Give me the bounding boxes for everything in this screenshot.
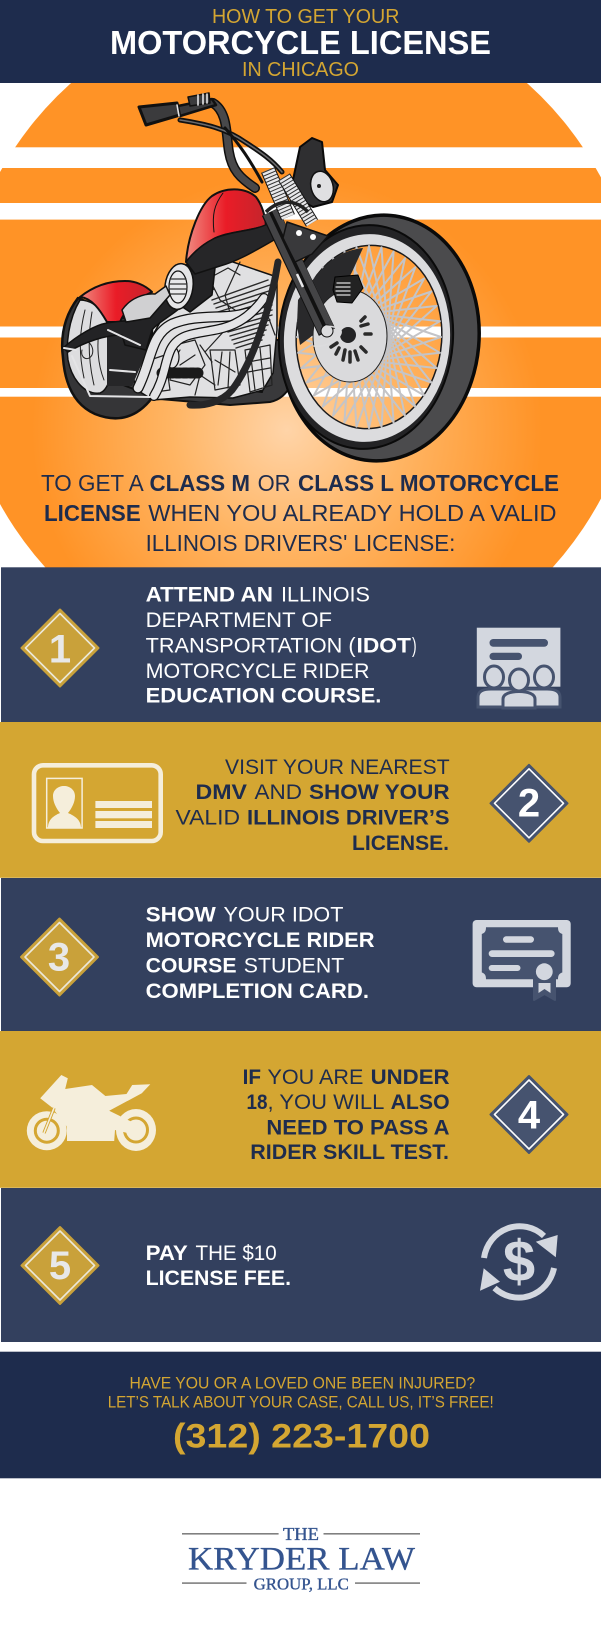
rear fender	[80, 281, 152, 322]
intro text: CLASS M	[150, 470, 250, 496]
step 4 text: RIDER SKILL TEST.	[250, 1141, 449, 1164]
logo	[182, 1524, 420, 1593]
step 2 text	[176, 756, 450, 855]
step 5 text: THE $10	[196, 1242, 277, 1265]
front tire	[278, 213, 481, 463]
air cleaner	[162, 262, 215, 312]
step 4 text	[243, 1066, 450, 1164]
step 1 text: MOTORCYCLE RIDER	[146, 660, 370, 683]
panel: step 4	[0, 1031, 601, 1188]
front fork	[266, 210, 341, 346]
intro text: WHEN YOU ALREADY HOLD A VALID	[148, 500, 557, 526]
icon: driver's license	[34, 765, 161, 841]
sunset circle with stripes	[0, 0, 601, 680]
panel: call to action: HAVE YOU OR A LOVED ONE BEEN INJURED?	[130, 1373, 475, 1392]
badge: 3: 3	[48, 936, 70, 980]
step 3 text: COURSE	[146, 955, 237, 978]
front wheel spokes	[297, 246, 441, 428]
step 4 text: , YOU WILL	[268, 1091, 384, 1114]
step 4 text: YOU ARE	[268, 1066, 363, 1089]
logo: THE	[283, 1524, 319, 1544]
step 4 text: NEED TO PASS A	[266, 1116, 450, 1139]
title banner	[0, 0, 601, 83]
step 1 text: )	[412, 634, 417, 657]
step 1 text: DEPARTMENT OF	[146, 609, 332, 632]
step 1 text: ATTEND AN	[146, 584, 273, 607]
step 3 text: STUDENT	[244, 955, 344, 978]
badge: 1: 1	[49, 628, 71, 672]
badge: 3	[21, 918, 98, 996]
badge: 5: 5	[49, 1244, 71, 1288]
step 1 text	[146, 584, 417, 708]
step 4 text: UNDER	[371, 1066, 450, 1089]
icon: money cycle	[480, 1226, 558, 1298]
badge: 1	[22, 610, 98, 686]
step 2 text: AND	[254, 781, 302, 804]
panel: step 3	[1, 878, 601, 1031]
fuel tank	[186, 189, 274, 274]
logo: KRYDER LAW	[188, 1541, 415, 1577]
step 2 text: VALID	[176, 806, 240, 829]
step 5 text: LICENSE FEE.	[146, 1267, 291, 1290]
step 4 text: ALSO	[391, 1091, 450, 1114]
main frame	[63, 285, 188, 352]
rear wheel	[62, 298, 152, 418]
downtube	[190, 262, 278, 405]
handlebars and controls	[139, 93, 282, 188]
panel: step 1	[1, 567, 601, 722]
step 3 text: MOTORCYCLE RIDER	[146, 929, 374, 952]
panel: call to action: LET’S TALK ABOUT YOUR CASE, CALL US, IT’S FREE!	[108, 1392, 494, 1411]
title banner: MOTORCYCLE LICENSE	[110, 24, 491, 61]
step 3 text: YOUR IDOT	[224, 904, 344, 927]
intro text: OR	[258, 470, 290, 496]
step 1 text: ILLINOIS	[281, 584, 370, 607]
badge: 2	[490, 765, 568, 842]
intro text: TO GET A	[41, 470, 145, 496]
step 2 text: SHOW YOUR	[309, 781, 450, 804]
step 2 text: LICENSE.	[352, 832, 449, 855]
step 1 text: IDOT	[356, 634, 411, 657]
title banner: HOW TO GET YOUR	[212, 6, 399, 28]
panel: step 2	[0, 722, 601, 878]
step 2 text: ILLINOIS DRIVER’S	[247, 806, 450, 829]
brake caliper	[333, 275, 363, 303]
brake disc	[313, 290, 387, 382]
icon: classroom	[477, 628, 560, 708]
brake mount shadow	[297, 248, 363, 345]
panel: call to action	[0, 1352, 601, 1478]
swing arm	[107, 325, 150, 386]
badge: 4: 4	[518, 1093, 541, 1137]
step 4 text: 18	[246, 1091, 268, 1114]
step 5 text	[146, 1242, 291, 1290]
phone number: (312) 223-1700	[173, 1418, 430, 1456]
step 2 text: VISIT YOUR NEAREST	[225, 756, 450, 779]
seat shape	[122, 286, 170, 322]
fork springs	[266, 170, 312, 223]
triple tree bracket	[283, 222, 328, 262]
badge: 4	[490, 1076, 568, 1153]
step 5 text: PAY	[146, 1242, 188, 1265]
motorcycle illustration	[62, 93, 489, 469]
intro text: ILLINOIS DRIVERS' LICENSE:	[146, 530, 455, 556]
intro text: LICENSE	[44, 500, 141, 526]
step 1 text: EDUCATION COURSE.	[146, 685, 381, 708]
exhaust pipes	[138, 298, 264, 396]
step 3 text: SHOW	[146, 904, 216, 927]
intro text: CLASS L MOTORCYCLE	[298, 470, 559, 496]
step 4 text: IF	[243, 1066, 261, 1089]
engine block	[130, 260, 277, 400]
icon: certificate	[473, 920, 571, 1000]
step 1 text: TRANSPORTATION (	[146, 634, 356, 657]
title banner: IN CHICAGO	[242, 59, 359, 81]
badge: 5	[22, 1227, 98, 1304]
step 3 text	[146, 904, 374, 1003]
icon: money cycle: $	[503, 1229, 535, 1294]
panel: step 5	[1, 1188, 601, 1342]
step 2 text: DMV	[196, 781, 247, 804]
intro text	[41, 470, 559, 556]
step 3 text: COMPLETION CARD.	[146, 980, 369, 1003]
headlight	[293, 138, 338, 207]
logo: GROUP, LLC	[254, 1574, 349, 1593]
frame rails	[64, 330, 150, 397]
icon: sport motorcycle	[27, 1075, 156, 1151]
badge: 2: 2	[518, 782, 540, 826]
belly and lower frame	[118, 340, 292, 405]
